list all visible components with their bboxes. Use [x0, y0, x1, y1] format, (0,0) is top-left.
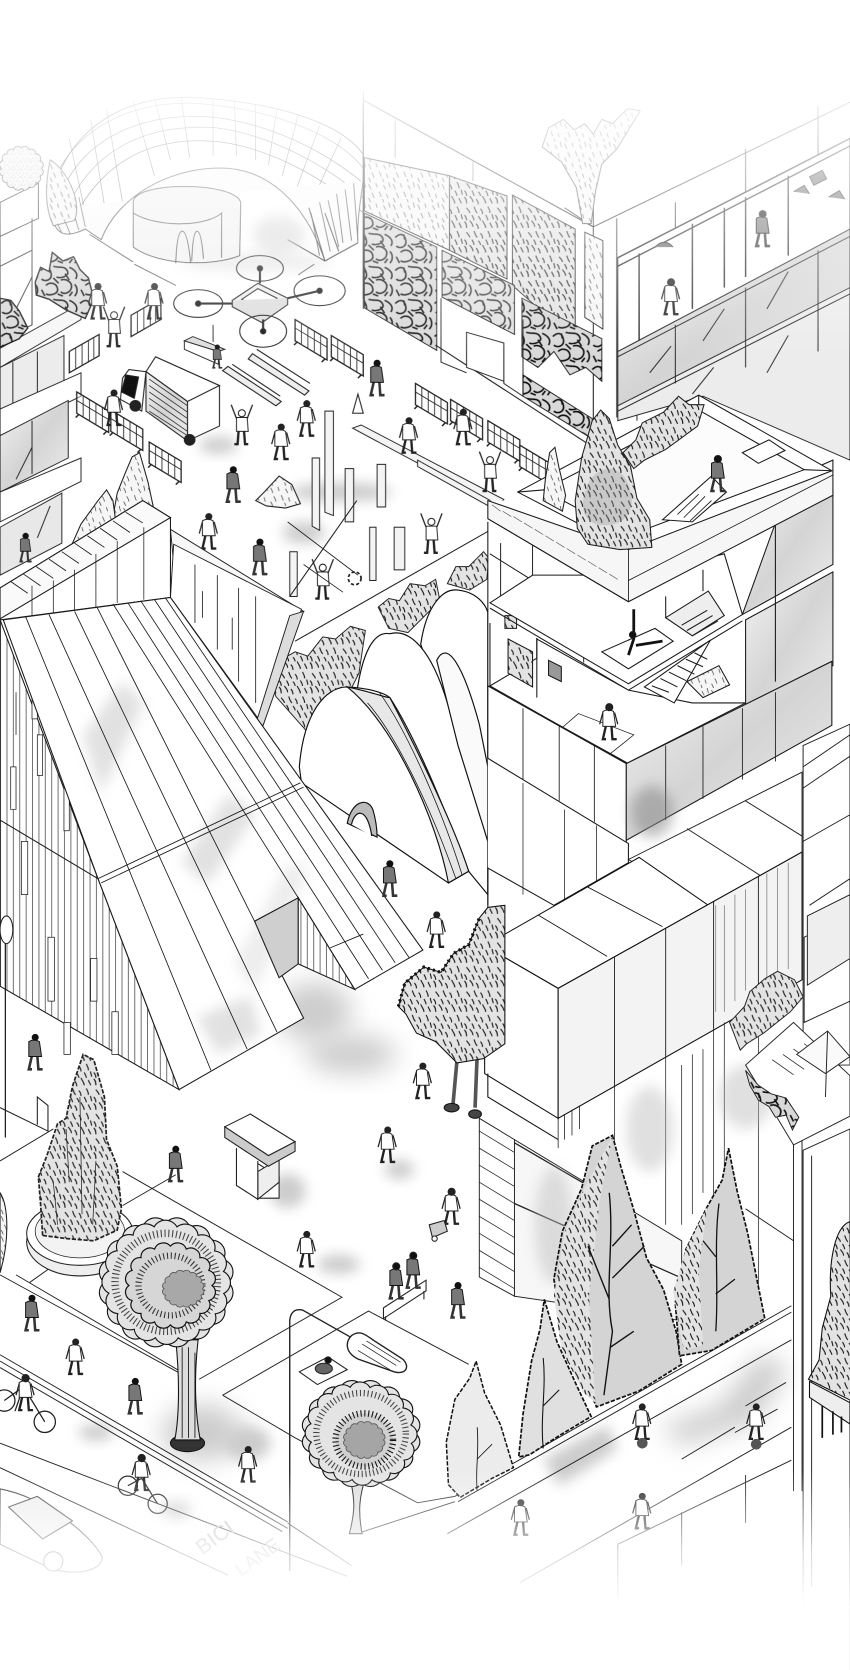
green wall panel: bottom hedge — [523, 375, 592, 439]
open office floor — [618, 138, 850, 351]
lamp post left — [0, 916, 13, 1137]
building: left stack — [0, 183, 81, 575]
traffic cone — [353, 394, 363, 413]
upper right glass bays — [742, 490, 833, 615]
convertible car — [0, 1489, 102, 1572]
building: green wall block — [363, 91, 603, 447]
glass volume left face — [488, 686, 626, 844]
building: central block with terrace — [488, 395, 833, 937]
wash inside dome — [254, 215, 305, 253]
upper room walls — [490, 533, 703, 662]
left edge tree sliver — [0, 1193, 7, 1273]
arch middle — [357, 633, 488, 895]
A-frame roof strip — [0, 501, 170, 620]
bollard and sign near fountain — [0, 1097, 48, 1131]
lower room walls and bookcase — [490, 623, 537, 698]
green wall panel: upper middle — [449, 176, 507, 279]
large round tree — [92, 1210, 240, 1452]
top fade — [0, 0, 850, 362]
yoga mat and figure — [602, 628, 673, 669]
upper stairwell — [666, 591, 724, 636]
lower glazed building — [479, 1004, 802, 1491]
roof sunlight washes — [83, 682, 309, 1054]
hedge line — [295, 531, 488, 641]
picnic mat — [299, 1357, 347, 1385]
entrance door — [467, 332, 504, 381]
medium street tree — [398, 905, 505, 1118]
right edge planter tree — [808, 1222, 850, 1438]
terrace trees — [543, 396, 704, 550]
kiosk — [225, 1114, 295, 1199]
upper floor plate — [490, 554, 742, 684]
construction workers — [88, 283, 501, 599]
glass volume right face — [626, 661, 832, 840]
pipe bundles — [223, 349, 310, 406]
box left face — [485, 946, 558, 1118]
arch back — [421, 590, 488, 841]
street lamp — [290, 1310, 407, 1571]
A-frame main roof — [3, 597, 423, 1090]
descending stairs — [644, 640, 710, 703]
cyclists — [0, 1375, 167, 1513]
bridge pedestrians — [511, 1403, 765, 1535]
umbrella — [797, 1031, 850, 1074]
terrace stair hatch — [663, 476, 726, 522]
building: slanted back block — [170, 529, 304, 725]
A-frame wall — [0, 620, 179, 1090]
roof panel seams — [26, 597, 409, 1070]
lower room: deck — [490, 639, 746, 764]
plaza ground lines — [0, 1129, 791, 1598]
green wall panel: narrow — [585, 232, 603, 329]
A-frame building — [0, 501, 423, 1090]
arch sculptures — [299, 590, 488, 895]
A-frame window slits — [11, 682, 118, 1054]
cypress tree 2 — [673, 1148, 765, 1356]
ground shadows — [79, 253, 788, 1519]
terrace deck — [518, 395, 832, 550]
bush on terrace — [0, 252, 94, 347]
plaza pedestrians — [26, 860, 465, 1481]
exercise mat in lower room — [554, 714, 634, 756]
dome: glass pavilion — [50, 97, 363, 285]
hedge wall behind arches — [295, 530, 488, 724]
terrace person — [711, 456, 725, 491]
hanging bush — [730, 971, 803, 1050]
roof tree top left — [0, 146, 43, 190]
green wall panel: lower middle — [442, 250, 514, 334]
bottom white margin — [0, 1606, 850, 1670]
delivery truck — [120, 357, 219, 445]
terrace deck — [746, 1022, 850, 1145]
road marking: BICI LANE — [191, 1516, 284, 1581]
ground lines in yard — [288, 522, 358, 592]
fountain tree in round planter — [27, 1054, 133, 1276]
construction cart with tools — [184, 325, 225, 368]
road marking: BICI LANE: LANE — [232, 1535, 284, 1581]
plaza pavement between blocks — [628, 772, 802, 905]
A-frame entrance recess — [255, 898, 298, 978]
wash on glass corner — [631, 786, 673, 837]
lower left wall — [488, 758, 628, 905]
arch doorway — [347, 802, 377, 837]
interior desk and plant — [527, 575, 594, 616]
green wall panel: upper right — [512, 195, 575, 341]
arch front — [299, 687, 469, 883]
road marking: BICI LANE: BICI — [191, 1516, 239, 1560]
small round tree — [297, 1373, 425, 1534]
crowd-control barriers — [69, 298, 552, 488]
ring and lumber — [213, 501, 361, 610]
lower floor edge — [488, 661, 832, 764]
terrace crates — [742, 440, 785, 463]
right side building with terrace — [730, 724, 850, 1670]
green wall panel: hanging vines — [522, 298, 602, 381]
box right face — [558, 852, 802, 1118]
tree left of dome — [46, 160, 77, 226]
cypress tree 1 large — [554, 1135, 682, 1407]
cypress tree 3 — [519, 1299, 591, 1457]
lower box building — [485, 852, 802, 1148]
building: office tower right — [565, 102, 850, 469]
bush small — [0, 298, 28, 347]
steel posts and beams — [290, 411, 504, 596]
slab under terrace — [488, 460, 833, 602]
bottom fade — [0, 1470, 850, 1608]
soft wash on lower building — [535, 1065, 772, 1283]
hedge bushes — [272, 552, 489, 748]
rubble pile — [256, 476, 300, 508]
green wall panel: dark lower left — [364, 213, 437, 350]
bench with people — [383, 1252, 426, 1321]
green wall panel: upper left — [364, 158, 449, 250]
box top face — [485, 852, 802, 988]
roof garden on tower — [542, 109, 640, 224]
cypress tree 4 — [446, 1361, 513, 1497]
stroller and parent — [429, 1188, 460, 1241]
drone — [174, 256, 345, 347]
rock-shaped topiary — [72, 453, 154, 545]
block base — [488, 501, 833, 840]
